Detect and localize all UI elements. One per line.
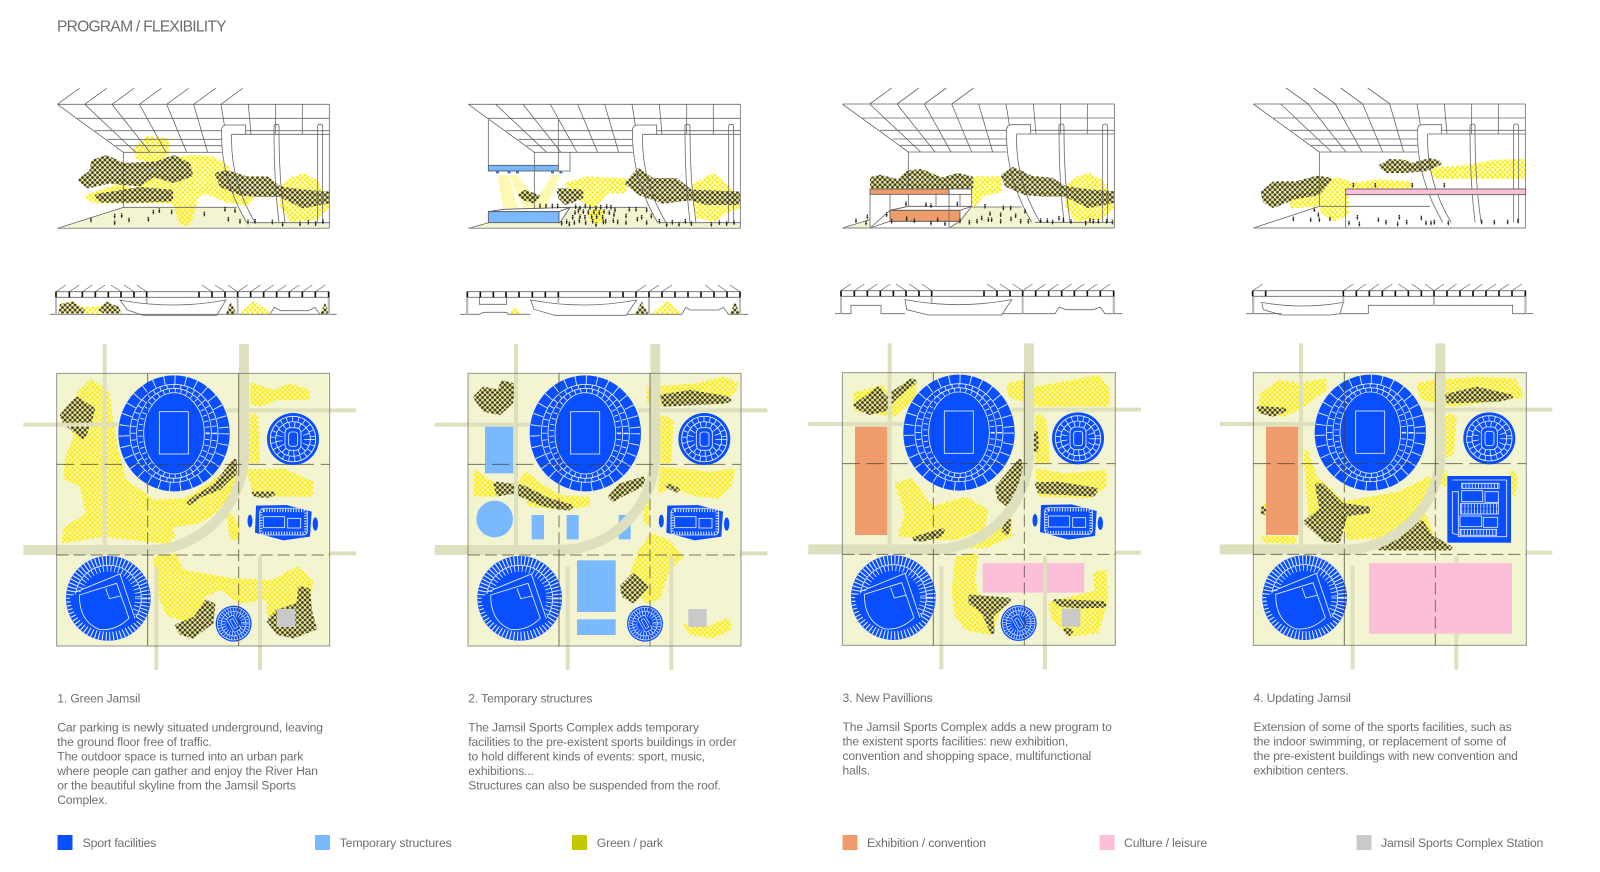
text 2: exhibitions...: [468, 764, 534, 778]
panel: 2 Temporary structures: [435, 104, 767, 793]
title: PROGRAM / FLEXIBILITY: [57, 18, 227, 36]
text 3: 3. New Pavillions: [842, 691, 933, 705]
site plan 1: [23, 344, 356, 670]
people: [855, 201, 1113, 226]
temporary stage: [488, 207, 570, 223]
text 1: where people can gather and enjoy the River Han: [56, 764, 318, 778]
section perspective 3: [842, 88, 1114, 228]
long section 1: [50, 285, 337, 315]
text 2: to hold different kinds of events: sport, music,: [468, 750, 705, 764]
panel: 3 New Pavillions: [808, 88, 1141, 778]
text 2: Structures can also be suspended from the roof.: [468, 778, 721, 792]
text 3: the existent sports facilities: new exhibition,: [842, 735, 1068, 749]
text 1: The outdoor space is turned into an urban park: [57, 750, 304, 764]
roof overhang lines: [1286, 88, 1390, 104]
temporary structures: [476, 427, 631, 635]
exhibition block: [855, 427, 887, 535]
roof overhang lines: [57, 88, 243, 104]
text 3: halls.: [842, 764, 870, 778]
culture block: [983, 563, 1084, 593]
text 1: Car parking is newly situated underground, leaving: [57, 721, 323, 735]
legend: sport facilities: Sport facilities: [83, 836, 156, 850]
culture block: [1369, 563, 1512, 634]
people: [1292, 183, 1519, 226]
site plan 4: [1220, 343, 1552, 669]
section perspective 1: [57, 88, 329, 228]
text 1: or the beautiful skyline from the Jamsil Sports: [57, 778, 296, 792]
section perspective 4: [1253, 88, 1526, 228]
panel: 4 Updating Jamsil: [1220, 88, 1552, 778]
legend: station: Jamsil Sports Complex Station: [1381, 836, 1544, 850]
legend: exhibition / convention: Exhibition / convention: [867, 836, 986, 850]
text 2: facilities to the pre-existent sports buildings in order: [468, 735, 737, 749]
legend: culture / leisure: Culture / leisure: [1124, 836, 1207, 850]
legend: temporary structures: Temporary structures: [340, 836, 452, 850]
text 4: the indoor swimming, or replacement of some of: [1254, 735, 1507, 749]
legend: green / park: [572, 835, 664, 850]
panel: 1 Green Jamsil: [23, 88, 356, 807]
text 4: the pre-existent buildings with new convention and: [1254, 749, 1518, 763]
long section 4: [1246, 284, 1533, 315]
section perspective 2: [468, 104, 741, 228]
culture platform: [1253, 152, 1526, 228]
text 1: Complex.: [57, 793, 107, 807]
text 3: convention and shopping space, multifunctional: [842, 749, 1091, 763]
text 3: The Jamsil Sports Complex adds a new program to: [842, 720, 1112, 734]
pavilion: [870, 189, 972, 228]
long section 3: [835, 284, 1122, 315]
long section 2: [460, 285, 748, 315]
site plan 3: [808, 343, 1141, 669]
text 1: 1. Green Jamsil: [57, 692, 140, 706]
legend: [58, 835, 1544, 850]
text 4: Extension of some of the sports facilities, such as: [1254, 720, 1512, 734]
legend: sport facilities: [58, 835, 156, 850]
new sports arena: [1447, 476, 1511, 543]
people: [90, 207, 324, 227]
exhibition block: [1266, 427, 1298, 535]
suspended temporary structure: [488, 120, 570, 208]
text 2: The Jamsil Sports Complex adds temporary: [468, 721, 700, 735]
text 2: 2. Temporary structures: [468, 692, 592, 706]
text 4: exhibition centers.: [1254, 764, 1349, 778]
text 4: 4. Updating Jamsil: [1254, 691, 1351, 705]
crowd: [539, 204, 735, 227]
legend: green / park: Green / park: [597, 836, 664, 850]
site plan 2: [435, 344, 767, 670]
text 1: the ground floor free of traffic.: [57, 735, 212, 749]
roof overhang lines: [870, 88, 974, 104]
